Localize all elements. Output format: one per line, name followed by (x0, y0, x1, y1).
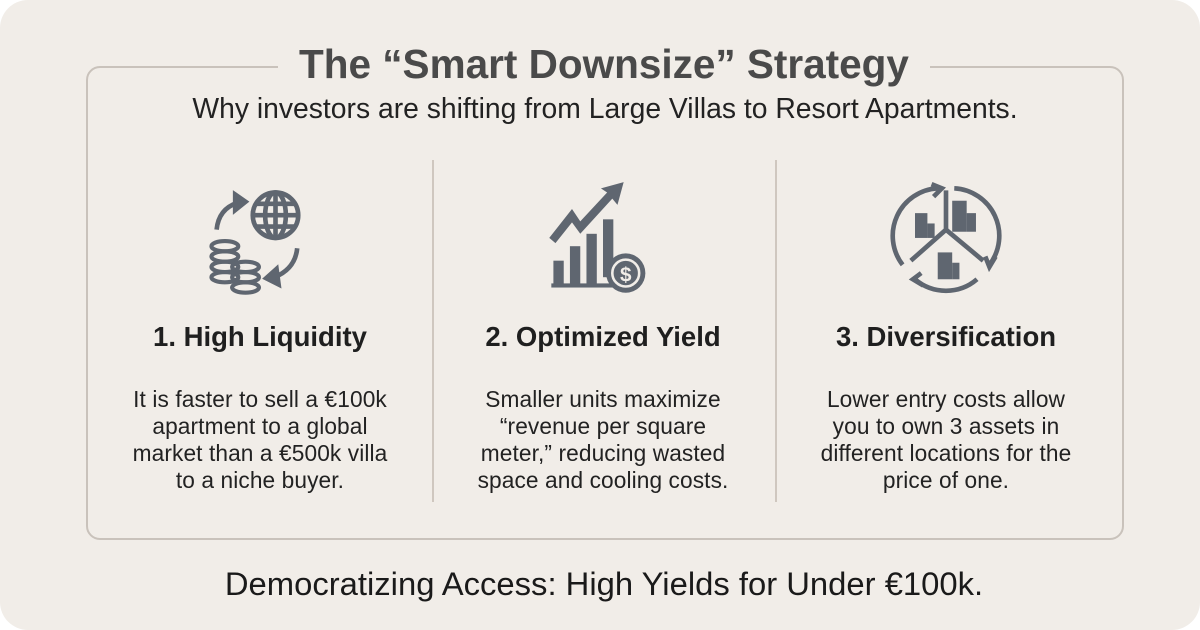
panel: optimized yield (478, 182, 728, 493)
footer tagline: Democratizing Access: High Yields for Under €100k. (225, 565, 983, 602)
subtitle: Why investors are shifting from Large Villas to Resort Apartments. (192, 92, 1018, 124)
body text (133, 386, 388, 493)
heading: 2. Optimized Yield (485, 321, 721, 352)
icon: chart with dollar (549, 182, 646, 293)
body text: Lower entry costs allow (827, 386, 1065, 412)
panel: diversification (821, 182, 1071, 493)
panel: high liquidity (133, 190, 388, 493)
icon: chart with dollar: $ (620, 263, 632, 286)
body text (821, 386, 1071, 493)
icon: coins globe (209, 190, 301, 295)
body text: space and cooling costs. (478, 467, 728, 493)
heading: 1. High Liquidity (153, 321, 367, 352)
body text: you to own 3 assets in (833, 413, 1059, 439)
title: The “Smart Downsize” Strategy (299, 41, 909, 87)
body text: meter,” reducing wasted (481, 440, 725, 466)
body text: It is faster to sell a €100k (133, 386, 387, 412)
body text: apartment to a global (152, 413, 368, 439)
heading: 3. Diversification (836, 321, 1056, 352)
icon: buildings cycle (890, 182, 1002, 294)
body text: market than a €500k villa (133, 440, 387, 466)
body text: Smaller units maximize (485, 386, 721, 412)
body text: price of one. (883, 467, 1009, 493)
body text: to a niche buyer. (176, 467, 344, 493)
body text: different locations for the (821, 440, 1071, 466)
body text (478, 386, 728, 493)
body text: “revenue per square (500, 413, 706, 439)
